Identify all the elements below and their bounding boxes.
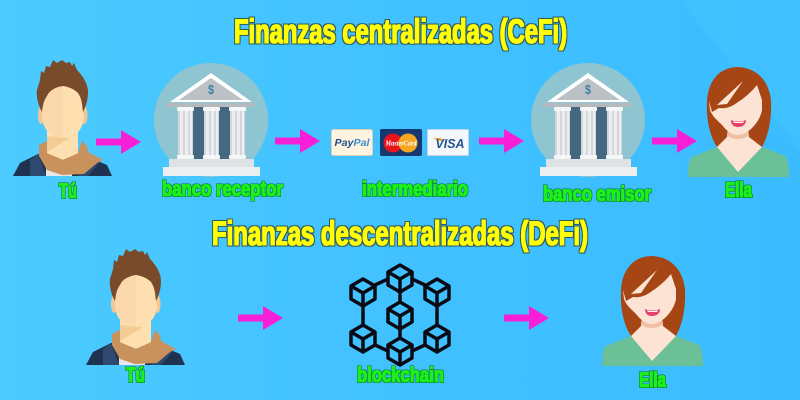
card: PayPal: PayPal bbox=[334, 137, 371, 149]
label: intermediario: intermediario bbox=[362, 178, 468, 201]
card: VISA: VISA bbox=[436, 136, 464, 151]
arrow: banco receptor to intermediario bbox=[275, 129, 320, 153]
icon: person Tú bbox=[13, 60, 112, 176]
icon: person Ella bbox=[688, 67, 789, 177]
label: Ella: Ella bbox=[725, 179, 752, 202]
label: Ella (DeFi): Ella bbox=[639, 369, 666, 392]
icon: person Ella (DeFi) bbox=[602, 256, 703, 366]
label: banco emisor: banco emisor bbox=[543, 183, 651, 206]
icons: payment cards bbox=[332, 129, 468, 156]
icon: banco receptor bbox=[154, 63, 268, 177]
icon: person Tú (DeFi) bbox=[86, 249, 185, 365]
arrow: blockchain to Ella bbox=[504, 306, 549, 330]
arrow: Tú to banco receptor bbox=[96, 130, 141, 154]
label: Tú (DeFi): Tú bbox=[126, 364, 145, 387]
label: banco receptor: banco receptor bbox=[162, 178, 283, 201]
card: MasterCard: MasterCard bbox=[385, 140, 417, 148]
arrow: intermediario to banco emisor bbox=[479, 129, 524, 153]
icon: blockchain network bbox=[351, 265, 449, 365]
arrow: banco emisor to Ella bbox=[652, 129, 697, 153]
title: DeFi: Finanzas descentralizadas (DeFi) bbox=[212, 215, 588, 253]
label: Tú: Tú bbox=[59, 180, 77, 203]
label: blockchain: blockchain bbox=[357, 364, 444, 387]
arrow: Tú to blockchain bbox=[238, 306, 283, 330]
icon: banco emisor bbox=[531, 63, 645, 177]
title: CeFi: Finanzas centralizadas (CeFi) bbox=[234, 13, 567, 51]
